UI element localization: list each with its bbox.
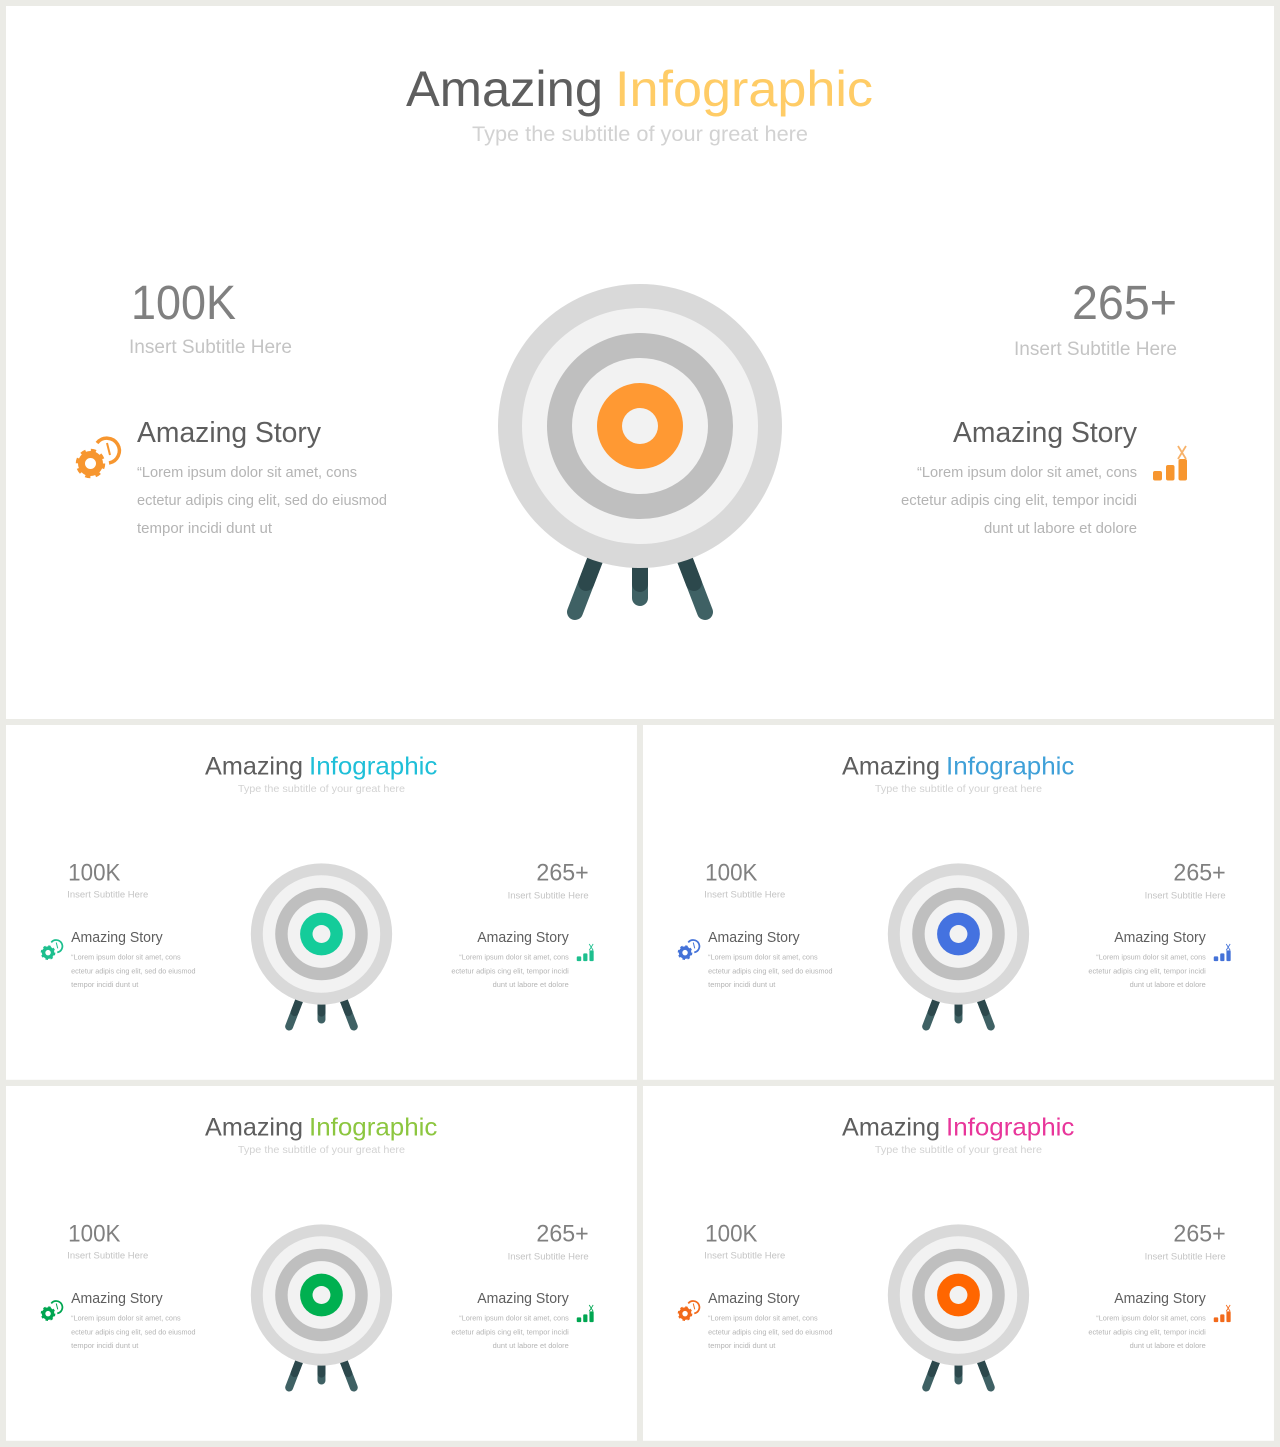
icon: bar chart <box>577 1305 594 1322</box>
target stand <box>289 1359 354 1388</box>
stat: 100K: 100K <box>705 860 758 887</box>
icon: gear and clock <box>679 940 699 959</box>
left story text: Amazing Story <box>71 1291 164 1307</box>
left story text: tempor incidi dunt ut <box>708 980 775 989</box>
right story text: dunt ut labore et dolore <box>984 521 1137 537</box>
subtitle: Type the subtitle of your great here <box>472 123 808 146</box>
right story text: dunt ut labore et dolore <box>493 980 569 989</box>
title: Infographic <box>309 1114 437 1142</box>
stat: 265+: 265+ <box>1173 1221 1226 1248</box>
title: Infographic <box>946 1114 1074 1142</box>
stat: 100K <box>704 860 785 901</box>
right story text: “Lorem ipsum dolor sit amet, cons <box>459 1313 569 1322</box>
title: Amazing <box>406 61 603 117</box>
panel: blue slide <box>643 725 1274 1080</box>
left story text: ectetur adipis cing elit, sed do eiusmod <box>137 493 387 509</box>
right story text: ectetur adipis cing elit, tempor incidi <box>1088 966 1206 975</box>
right story text <box>1088 1291 1207 1350</box>
title: Infographic <box>946 753 1074 781</box>
stat: 100K <box>67 1221 148 1262</box>
left story text: tempor incidi dunt ut <box>71 1341 138 1350</box>
right story text <box>451 930 570 989</box>
target rings <box>251 1224 392 1366</box>
stat: 100K: Insert Subtitle Here <box>704 1251 785 1262</box>
panel: main orange slide <box>6 6 1274 719</box>
right story text: dunt ut labore et dolore <box>493 1341 569 1350</box>
stat: 100K <box>704 1221 785 1262</box>
right story text: ectetur adipis cing elit, tempor incidi <box>451 1327 569 1336</box>
stat: 265+: Insert Subtitle Here <box>508 1252 589 1263</box>
target rings <box>888 1224 1029 1366</box>
left story text <box>137 417 387 537</box>
icon: bar chart <box>1153 446 1187 480</box>
right story text: ectetur adipis cing elit, tempor incidi <box>1088 1327 1206 1336</box>
left story text: Amazing Story <box>137 417 321 449</box>
left story text: Amazing Story <box>708 930 801 946</box>
stat: 265+ <box>1145 1221 1226 1263</box>
stat: 265+: 265+ <box>1072 277 1177 330</box>
stat: 100K: Insert Subtitle Here <box>67 1251 148 1262</box>
left story text: ectetur adipis cing elit, sed do eiusmod <box>71 966 196 975</box>
title <box>842 753 1074 781</box>
right story text <box>451 1291 570 1350</box>
icon: gear and clock <box>679 1301 699 1320</box>
left story text: “Lorem ipsum dolor sit amet, cons <box>137 465 357 481</box>
left story text <box>708 1291 833 1350</box>
panel: pink and orange slide <box>643 1086 1274 1441</box>
icon: gear and clock <box>42 940 62 959</box>
panel: green slide <box>6 1086 637 1441</box>
right story text: ectetur adipis cing elit, tempor incidi <box>451 966 569 975</box>
stat: 100K: Insert Subtitle Here <box>704 890 785 901</box>
right story text <box>901 417 1137 537</box>
right story text: Amazing Story <box>953 417 1137 449</box>
left story text: Amazing Story <box>71 930 164 946</box>
stat: 265+ <box>1145 860 1226 902</box>
left story text: “Lorem ipsum dolor sit amet, cons <box>71 1313 181 1322</box>
stat: 265+ <box>508 1221 589 1263</box>
left story text: ectetur adipis cing elit, sed do eiusmod <box>71 1327 196 1336</box>
stat: 100K <box>129 277 292 358</box>
right story text: dunt ut labore et dolore <box>1130 980 1206 989</box>
subtitle: Type the subtitle of your great here <box>238 1145 405 1156</box>
icon: bar chart <box>577 944 594 961</box>
right story text: Amazing Story <box>1114 930 1207 946</box>
left story text: tempor incidi dunt ut <box>708 1341 775 1350</box>
right story text: “Lorem ipsum dolor sit amet, cons <box>1096 952 1206 961</box>
left story text: ectetur adipis cing elit, sed do eiusmod <box>708 966 833 975</box>
stat: 100K: Insert Subtitle Here <box>67 890 148 901</box>
stat: 265+ <box>1014 277 1177 360</box>
right story text: Amazing Story <box>477 1291 570 1307</box>
stat: 265+: Insert Subtitle Here <box>1145 1252 1226 1263</box>
stat: 265+: 265+ <box>536 1221 589 1248</box>
title: Infographic <box>309 753 437 781</box>
title <box>205 1114 437 1142</box>
title: Amazing <box>842 753 940 781</box>
target stand <box>289 998 354 1027</box>
title: Amazing <box>205 753 303 781</box>
left story text: tempor incidi dunt ut <box>71 980 138 989</box>
right story text: “Lorem ipsum dolor sit amet, cons <box>1096 1313 1206 1322</box>
left story text: ectetur adipis cing elit, sed do eiusmod <box>708 1327 833 1336</box>
stat: 265+: Insert Subtitle Here <box>508 891 589 902</box>
target stand <box>926 1359 991 1388</box>
right story text <box>1088 930 1207 989</box>
left story text <box>71 1291 196 1350</box>
stat: 265+: Insert Subtitle Here <box>1145 891 1226 902</box>
stat: 100K <box>67 860 148 901</box>
left story text: “Lorem ipsum dolor sit amet, cons <box>71 952 181 961</box>
title: Amazing <box>842 1114 940 1142</box>
right story text: “Lorem ipsum dolor sit amet, cons <box>917 465 1137 481</box>
left story text: “Lorem ipsum dolor sit amet, cons <box>708 952 818 961</box>
icon: gear and clock <box>78 438 119 476</box>
panel: teal slide <box>6 725 637 1080</box>
right story text: dunt ut labore et dolore <box>1130 1341 1206 1350</box>
icon: bar chart <box>1214 1305 1231 1322</box>
left story text <box>71 930 196 989</box>
stat: 100K: 100K <box>131 277 236 330</box>
target stand <box>575 555 705 612</box>
subtitle: Type the subtitle of your great here <box>238 784 405 795</box>
title: Amazing <box>205 1114 303 1142</box>
left story text: tempor incidi dunt ut <box>137 521 272 537</box>
stat: 265+: Insert Subtitle Here <box>1014 339 1177 360</box>
stat: 265+: 265+ <box>1173 860 1226 887</box>
stat: 100K: 100K <box>705 1221 758 1248</box>
icon: gear and clock <box>42 1301 62 1320</box>
target rings <box>251 863 392 1005</box>
stat: 100K: Insert Subtitle Here <box>129 337 292 358</box>
right story text: Amazing Story <box>1114 1291 1207 1307</box>
target stand <box>926 998 991 1027</box>
left story text: “Lorem ipsum dolor sit amet, cons <box>708 1313 818 1322</box>
right story text: ectetur adipis cing elit, tempor incidi <box>901 493 1137 509</box>
icon: bar chart <box>1214 944 1231 961</box>
right story text: “Lorem ipsum dolor sit amet, cons <box>459 952 569 961</box>
stat: 265+: 265+ <box>536 860 589 887</box>
title: Infographic <box>615 61 873 117</box>
stat: 100K: 100K <box>68 860 121 887</box>
title <box>406 61 873 117</box>
subtitle: Type the subtitle of your great here <box>875 1145 1042 1156</box>
target rings <box>888 863 1029 1005</box>
stat: 265+ <box>508 860 589 902</box>
target rings <box>498 284 782 568</box>
title <box>205 753 437 781</box>
left story text: Amazing Story <box>708 1291 801 1307</box>
left story text <box>708 930 833 989</box>
right story text: Amazing Story <box>477 930 570 946</box>
subtitle: Type the subtitle of your great here <box>875 784 1042 795</box>
title <box>842 1114 1074 1142</box>
stat: 100K: 100K <box>68 1221 121 1248</box>
